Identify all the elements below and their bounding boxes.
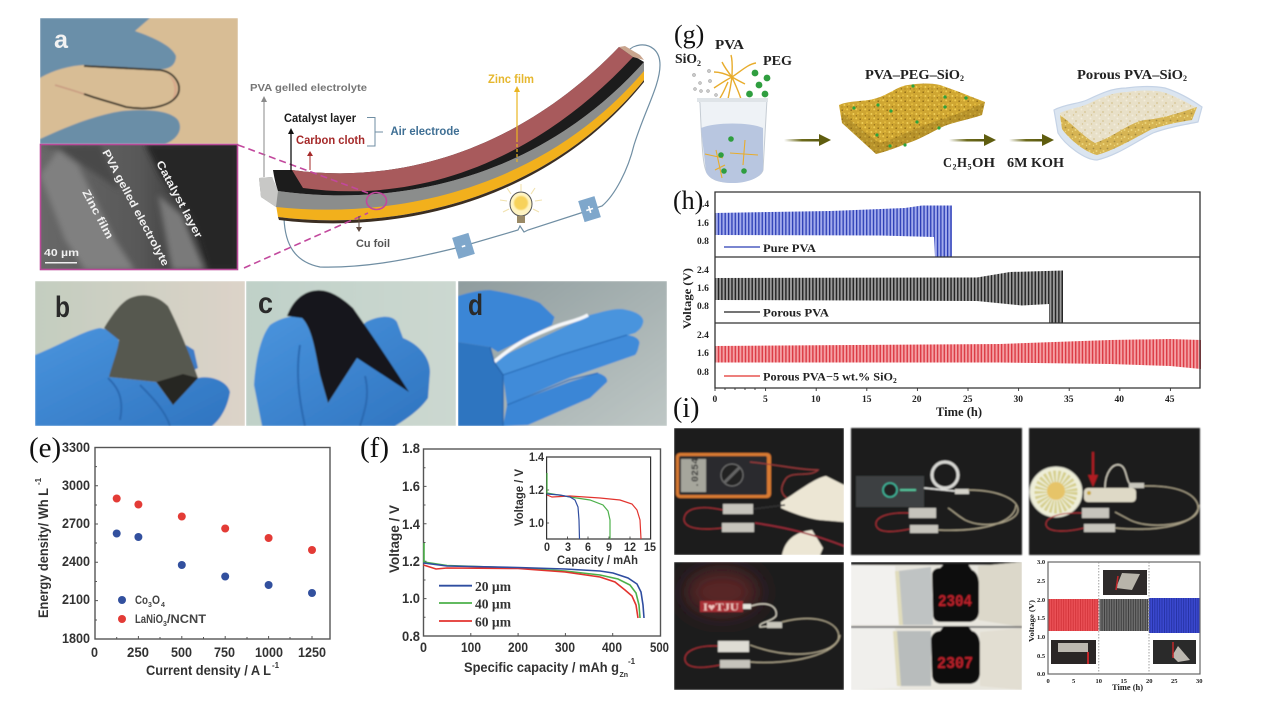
- panel c: black cloth on blue glove photo: [246, 281, 456, 426]
- legend: 3: [163, 621, 167, 628]
- chart e: energy density vs current density: [34, 439, 330, 678]
- chart h: cycling voltage profiles: 10: [811, 395, 821, 405]
- schematic label: PVA gelled electrolyte: PVA gelled electrolyte: [250, 82, 367, 94]
- legend: 20 µm: [475, 580, 511, 595]
- labels of ingredients: 2: [697, 59, 701, 68]
- panel label f: (f): [360, 432, 389, 464]
- panel label e: (e): [29, 432, 61, 464]
- legend: porous PVA SiO2: 2: [893, 376, 897, 385]
- x axis subscript: Zn: [620, 672, 628, 679]
- chart i: voltage stability under bending: 0.5: [1037, 653, 1046, 660]
- icon: minus terminal: [452, 233, 475, 259]
- chart h: cycling voltage profiles: 1.6: [697, 284, 709, 294]
- red trace: porous PVA with SiO2: [715, 339, 1201, 369]
- photo i4: LED sign: I♥TJU: [703, 602, 739, 614]
- inset chart: [512, 452, 657, 567]
- chart e: energy density vs current density: 750: [214, 644, 235, 660]
- chart i: voltage stability under bending: 2.0: [1037, 597, 1045, 604]
- y axis title: Voltage (V): [1027, 599, 1036, 642]
- schematic label: carbon cloth: Carbon cloth: [296, 135, 365, 147]
- chart i: voltage stability under bending: 0: [1046, 678, 1050, 685]
- chart e: energy density vs current density: 3300: [62, 439, 90, 455]
- panel a: letter: a: [54, 26, 69, 54]
- panel label i: (i): [673, 393, 699, 424]
- inset chart: 1.2: [529, 485, 544, 497]
- reagent labels: [943, 156, 1064, 172]
- legend: porous PVA SiO2: Porous PVA−5 wt.% SiO: [763, 372, 893, 384]
- chart e: energy density vs current density: 500: [171, 644, 192, 660]
- wire circuit: [284, 45, 660, 267]
- photo i1: multimeter: [674, 428, 844, 555]
- legend: porous PVA: Porous PVA: [763, 308, 830, 320]
- heading: Porous PVA-SiO2: 2: [1183, 74, 1187, 83]
- chart h: cycling voltage profiles: 0: [712, 395, 718, 405]
- inset chart: 9: [606, 542, 612, 554]
- SEM label: zinc film: Zinc film: [79, 188, 115, 241]
- schematic label: zinc film: [488, 74, 534, 162]
- chart i: voltage stability under bending: [1027, 559, 1202, 692]
- x axis superscript: -1: [272, 661, 280, 670]
- schematic label: catalyst layer: [284, 113, 357, 172]
- inset chart: 0: [544, 542, 550, 554]
- photo i2: phone charging: [851, 428, 1022, 555]
- heading: Porous PVA-SiO2: Porous PVA–SiO: [1077, 68, 1183, 83]
- chart f: voltage vs specific capacity: 100: [461, 639, 481, 655]
- red series: [113, 494, 316, 623]
- schematic label: catalyst layer: Catalyst layer: [284, 113, 357, 125]
- chart h: cycling voltage profiles: 30: [1014, 395, 1023, 405]
- legend: /NCNT: [167, 612, 207, 626]
- reagent labels: 2: [952, 162, 956, 172]
- chart h: cycling voltage profiles: 20: [912, 395, 922, 405]
- chart f: voltage vs specific capacity: 1.6: [402, 478, 420, 494]
- heading: PVA-PEG-SiO2: PVA–PEG–SiO: [865, 68, 960, 83]
- chart f: voltage vs specific capacity: 1.8: [402, 440, 420, 456]
- photo i4: LED sign: [674, 562, 844, 690]
- legend: Co: [135, 593, 148, 607]
- air electrode bracket and label: [367, 118, 460, 146]
- panel b: letter: b: [55, 291, 70, 324]
- schematic label: Cu foil: [356, 216, 390, 250]
- photo i5: smart watches: 2304: [938, 593, 972, 612]
- panel label g: (g): [674, 20, 704, 49]
- schematic label: Cu foil: Cu foil: [356, 238, 390, 250]
- chart f: voltage vs specific capacity: 400: [602, 639, 622, 655]
- chart f: voltage vs specific capacity: 500: [650, 639, 669, 655]
- photo i5: smart watches: [851, 562, 1022, 690]
- schematic label: carbon cloth: [296, 135, 365, 170]
- chart e: energy density vs current density: 250: [127, 644, 149, 660]
- legend: pure PVA: Pure PVA: [763, 243, 817, 255]
- inset chart: 3: [565, 542, 571, 554]
- chart h: cycling voltage profiles: [680, 192, 1201, 419]
- SEM label: catalyst layer: Catalyst layer: [153, 159, 205, 241]
- icon: light bulb: [500, 184, 542, 223]
- chart h: cycling voltage profiles: 2.4: [697, 266, 709, 276]
- inset chart: 1.0: [529, 518, 544, 530]
- chart h: cycling voltage profiles: 0.8: [697, 302, 709, 312]
- schematic label: zinc film: Zinc film: [488, 74, 534, 86]
- SEM label: PVA gelled electrolyte: PVA gelled electrolyte: [99, 148, 171, 268]
- reagent labels: C: [943, 156, 952, 171]
- legend: [439, 580, 511, 630]
- legend: LaNiO: [135, 612, 163, 626]
- chart e: energy density vs current density: 2100: [62, 591, 90, 607]
- y axis superscript: -1: [34, 477, 43, 485]
- curves: [424, 543, 644, 618]
- red carbon cloth: [292, 47, 633, 191]
- chart e: energy density vs current density: 1250: [298, 644, 326, 660]
- x axis superscript: -1: [628, 657, 636, 666]
- chart h: cycling voltage profiles: 5: [763, 395, 768, 405]
- scale bar label: 40 µm: [44, 248, 79, 259]
- labels of ingredients: PEG: [763, 54, 792, 69]
- legend: [135, 593, 207, 628]
- inset chart: 1.4: [529, 452, 545, 464]
- chart h: cycling voltage profiles: 35: [1064, 395, 1074, 405]
- legend: porous PVA: [724, 308, 830, 320]
- panel a: SEM cross-section micrograph: [40, 144, 238, 270]
- chart i: voltage stability under bending: 5: [1072, 678, 1076, 685]
- chart h: cycling voltage profiles: 15: [862, 395, 872, 405]
- chart e: energy density vs current density: 2400: [62, 553, 90, 569]
- chart i: voltage stability under bending: 20: [1146, 678, 1152, 685]
- icon: plus terminal: +: [583, 200, 596, 218]
- inset photo: flat: [1051, 640, 1096, 664]
- legend: O: [152, 593, 160, 607]
- chart h: cycling voltage profiles: 0.8: [697, 237, 709, 247]
- porous block with transparent shell: [1054, 86, 1202, 160]
- chart h: cycling voltage profiles: 1.6: [697, 349, 709, 359]
- chart h: cycling voltage profiles: 25: [963, 395, 973, 405]
- chart f: voltage vs specific capacity: 300: [555, 639, 575, 655]
- chart e: energy density vs current density: 0: [91, 644, 98, 660]
- legend: 60 µm: [475, 616, 511, 630]
- x axis title: Time (h): [936, 405, 982, 419]
- black catalyst layer: [273, 47, 644, 195]
- inset chart: 6: [585, 542, 591, 554]
- x axis title: Current density / A L: [146, 662, 271, 678]
- yellow composite block: [839, 84, 985, 154]
- icon: minus terminal: -: [459, 236, 468, 253]
- panel g: synthesis scheme: [675, 38, 1202, 183]
- icon: beaker: [697, 98, 768, 183]
- chart f: voltage vs specific capacity: 200: [508, 639, 528, 655]
- reagent labels: H: [957, 156, 967, 171]
- chart f: voltage vs specific capacity: [386, 440, 669, 679]
- legend: 40 µm: [475, 598, 511, 612]
- panel d: transparent film on blue glove photo: [458, 281, 667, 426]
- icon: SiO2 particles: [692, 69, 718, 96]
- y axis title: Voltage / V: [386, 504, 402, 573]
- chart e: energy density vs current density: 1000: [255, 644, 283, 660]
- arrow 2: [949, 134, 996, 146]
- air electrode bracket and label: Air electrode: [390, 126, 460, 138]
- legend: 3: [148, 602, 152, 609]
- reagent labels: 5: [968, 162, 972, 172]
- chart i: voltage stability under bending: 25: [1171, 678, 1178, 685]
- arrow 3: [1009, 134, 1054, 146]
- y axis title: Voltage (V): [680, 268, 694, 329]
- labels of ingredients: [675, 38, 792, 69]
- chart h: cycling voltage profiles: 45: [1165, 395, 1175, 405]
- inset chart: 12: [624, 542, 636, 554]
- blue trace: pure PVA: [715, 206, 952, 257]
- chart f: voltage vs specific capacity: 1.4: [402, 516, 420, 532]
- icon: plus terminal: [578, 196, 601, 222]
- legend: 4: [161, 602, 165, 609]
- legend: porous PVA SiO2: [724, 372, 897, 385]
- panel label h: (h): [673, 186, 703, 215]
- photo i3: handheld fan: [1029, 428, 1200, 555]
- photo i1: multimeter: .0254: [691, 458, 702, 488]
- panel d: letter: d: [468, 289, 483, 322]
- pink zoom indicator: [238, 145, 386, 268]
- inset chart: 15: [644, 542, 657, 554]
- chart i: voltage stability under bending: 1.5: [1037, 615, 1046, 622]
- chart i: voltage stability under bending: 10: [1096, 678, 1102, 685]
- chart f: voltage vs specific capacity: 1.2: [402, 553, 420, 569]
- y axis title: Energy density/ Wh L: [35, 488, 51, 618]
- panel b: gray cloth on blue glove photo: [35, 281, 245, 426]
- panel c: letter: c: [258, 287, 273, 320]
- schematic: flexible battery layers: [259, 45, 660, 267]
- axes frame: [715, 192, 1200, 388]
- chart h: cycling voltage profiles: 2.4: [697, 331, 709, 341]
- black trace: porous PVA: [715, 270, 1063, 323]
- labels of ingredients: SiO: [675, 52, 697, 67]
- chart f: voltage vs specific capacity: 0: [420, 639, 427, 655]
- chart i: voltage stability under bending: 1.0: [1037, 634, 1045, 641]
- chart h: cycling voltage profiles: 1.6: [697, 219, 709, 229]
- chart e: energy density vs current density: 3000: [62, 477, 90, 493]
- labels of ingredients: PVA: [715, 38, 745, 53]
- chart e: energy density vs current density: 2700: [62, 515, 90, 531]
- reagent labels: OH: [972, 156, 995, 171]
- chart e: energy density vs current density: 1800: [62, 630, 90, 646]
- icon: PEG green spheres: [746, 70, 770, 97]
- chart i: voltage stability under bending: 2.5: [1037, 578, 1046, 585]
- yellow zinc layer: [276, 70, 644, 220]
- heading: PVA-PEG-SiO2: 2: [960, 74, 964, 83]
- chart i: voltage stability under bending: 3.0: [1037, 559, 1045, 566]
- x axis title: Specific capacity / mAh g: [464, 659, 619, 675]
- legend: pure PVA: [724, 243, 817, 255]
- icon: PVA polymer strands: [714, 55, 756, 99]
- chart i: voltage stability under bending: 0.0: [1037, 671, 1045, 678]
- x axis title: Time (h): [1112, 683, 1143, 692]
- chart h: cycling voltage profiles: 0.8: [697, 368, 709, 378]
- photo i5: smart watches: 2307: [937, 655, 973, 674]
- inset photo: folded: [1153, 640, 1196, 664]
- arrow 1: [784, 134, 831, 146]
- chart f: voltage vs specific capacity: 1.0: [402, 590, 420, 606]
- chart f: voltage vs specific capacity: 0.8: [402, 628, 420, 644]
- blue series: [113, 530, 316, 604]
- inset photo: bent: [1103, 570, 1147, 595]
- schematic label: PVA gelled electrolyte: [250, 82, 367, 177]
- chart i: voltage stability under bending: 30: [1196, 678, 1202, 685]
- panel a: photo of bent battery: [40, 18, 238, 144]
- chart i: voltage stability under bending: 15: [1120, 678, 1128, 685]
- reagent labels: 6M KOH: [1007, 156, 1064, 171]
- chart h: cycling voltage profiles: .4: [702, 200, 709, 210]
- gray electrolyte layer: [259, 62, 644, 210]
- inset y axis title: Voltage / V: [512, 469, 526, 526]
- chart h: cycling voltage profiles: 40: [1114, 395, 1124, 405]
- inset x axis title: Capacity / mAh: [557, 553, 638, 567]
